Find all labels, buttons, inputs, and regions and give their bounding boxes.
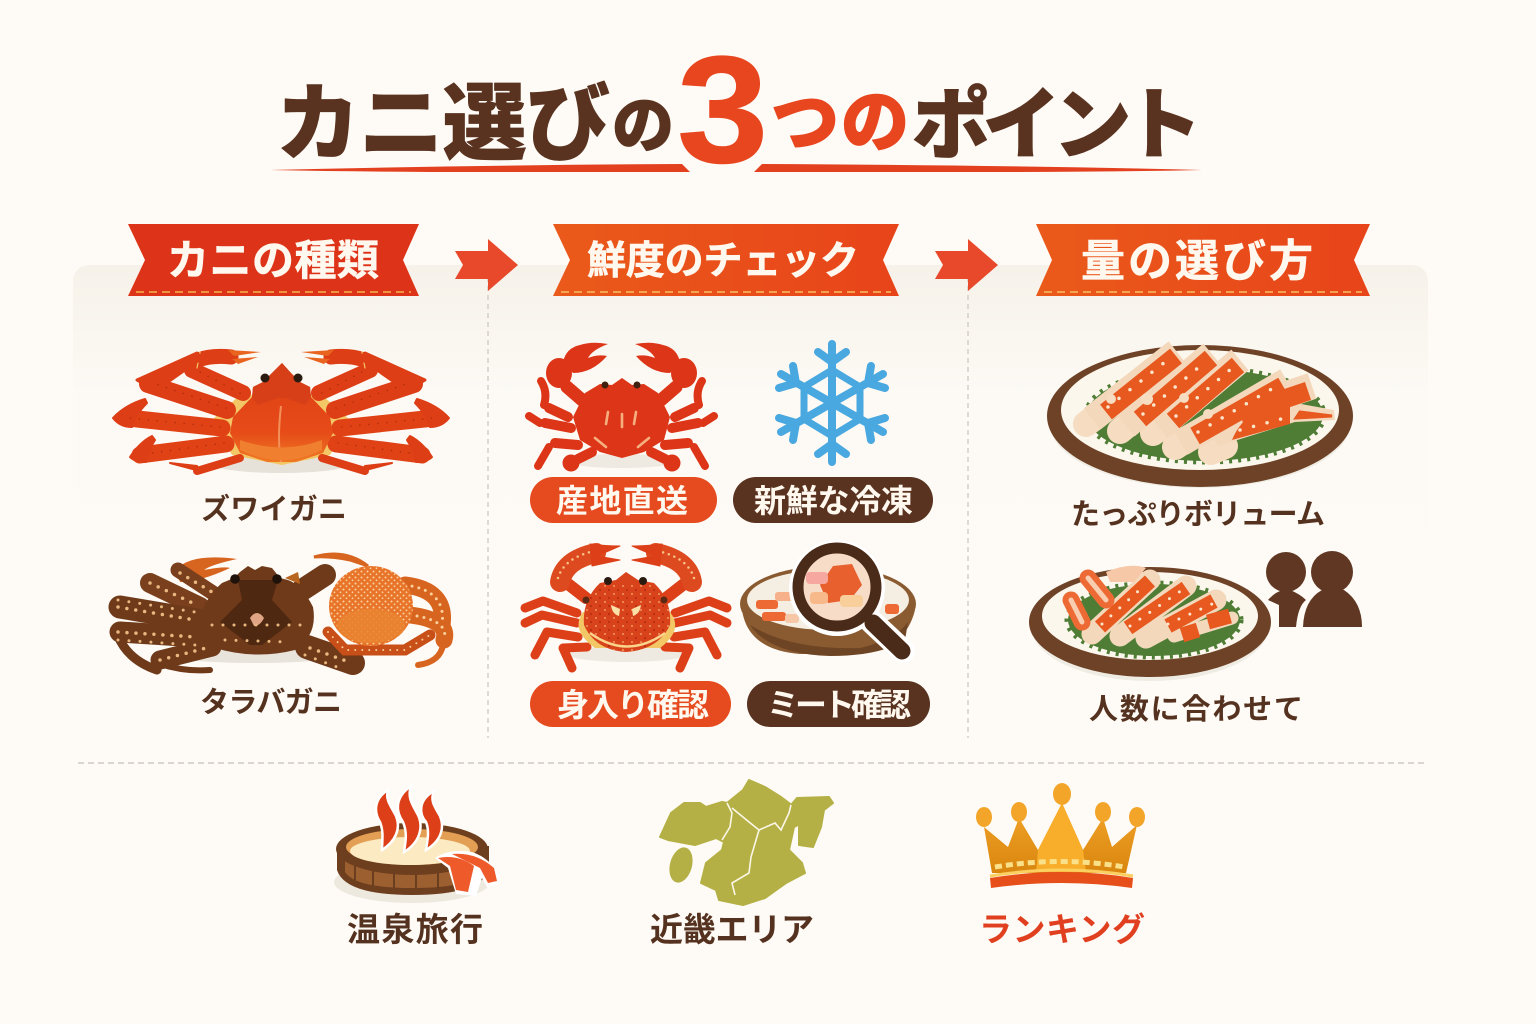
icon: small plate of crab legs bbox=[1029, 566, 1271, 681]
label: 人数に合わせて: 人数に合わせて bbox=[1089, 693, 1303, 726]
label: ズワイガニ: ズワイガニ bbox=[201, 492, 347, 526]
label: 温泉旅行: 温泉旅行 bbox=[347, 911, 483, 948]
pill: 新鮮な冷凍: 新鮮な冷凍 bbox=[754, 483, 913, 519]
title: の bbox=[612, 92, 674, 161]
title: カニ選び bbox=[276, 77, 610, 171]
pill: ミート確認 bbox=[747, 681, 930, 727]
icon: snowflake bbox=[779, 344, 885, 462]
icon: large plate of crab legs bbox=[1047, 345, 1353, 488]
label: ランキング: ランキング bbox=[979, 911, 1145, 948]
ribbon: 鮮度のチェック: 鮮度のチェック bbox=[587, 240, 859, 283]
icon: two people bbox=[1266, 551, 1362, 627]
icon: Kinki region map bbox=[660, 780, 833, 905]
label: 近畿エリア: 近畿エリア bbox=[650, 911, 814, 948]
pill: 産地直送: 産地直送 bbox=[556, 483, 688, 519]
hairy crab bbox=[314, 554, 445, 665]
icon: bowl of crab meat under magnifier bbox=[740, 540, 916, 656]
pill: 新鮮な冷凍 bbox=[733, 477, 933, 523]
pill: ミート確認: ミート確認 bbox=[767, 687, 911, 723]
title: 3 bbox=[677, 25, 768, 195]
ribbon: 量の選び方 bbox=[1036, 224, 1370, 296]
icon: red crab bbox=[529, 343, 714, 472]
title: ポイント bbox=[912, 81, 1202, 169]
title: つの bbox=[771, 85, 909, 161]
title underline bbox=[270, 164, 1202, 172]
icon: smiling crab bbox=[525, 544, 727, 668]
title bbox=[270, 25, 1202, 195]
ribbon: 量の選び方: 量の選び方 bbox=[1081, 237, 1313, 286]
icon: crown bbox=[976, 783, 1145, 888]
ribbon: カニの種類 bbox=[128, 224, 419, 296]
panel: three column backdrop bbox=[73, 265, 1428, 740]
arrow 1 bbox=[455, 239, 518, 291]
label: たっぷりボリューム: たっぷりボリューム bbox=[1071, 498, 1325, 531]
pill: 身入り確認: 身入り確認 bbox=[557, 687, 709, 723]
pill: 身入り確認 bbox=[530, 681, 731, 727]
label: タラバガニ: タラバガニ bbox=[200, 686, 342, 719]
pill: 産地直送 bbox=[530, 477, 717, 523]
arrow 2 bbox=[935, 239, 998, 291]
ribbon: 鮮度のチェック bbox=[553, 224, 899, 296]
icon: king and hairy crab bbox=[118, 554, 445, 670]
ribbon: カニの種類: カニの種類 bbox=[167, 237, 379, 284]
icon: hot spring tub bbox=[334, 786, 500, 903]
icon: snow crab bbox=[113, 350, 449, 473]
